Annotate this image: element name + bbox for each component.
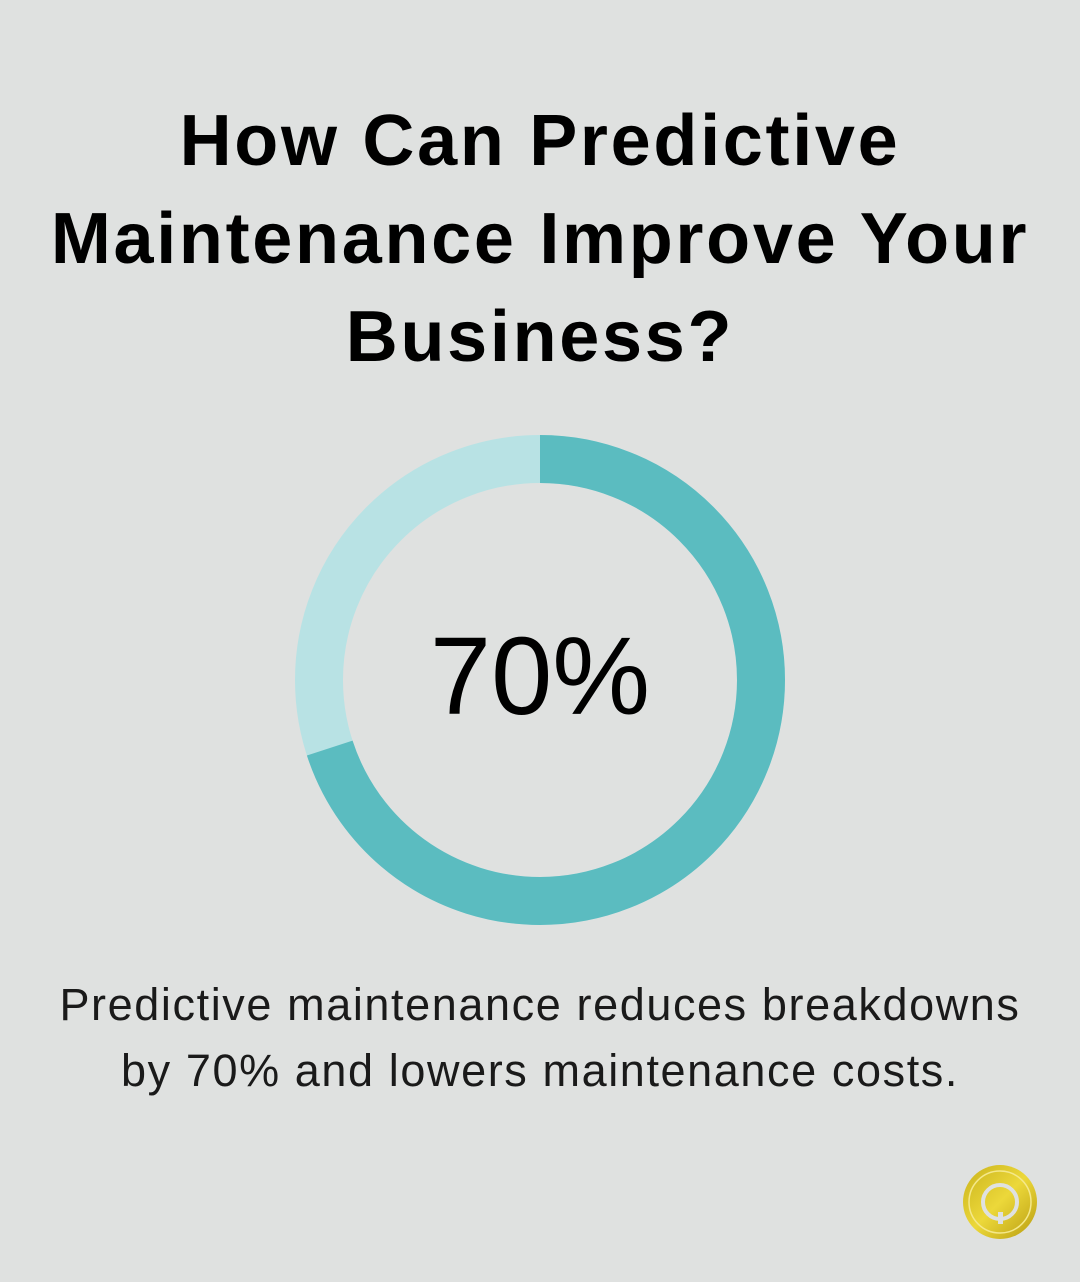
text block: by 70% and lowers maintenance costs.	[121, 1045, 959, 1096]
title	[51, 101, 1029, 377]
title: Business?	[346, 297, 734, 377]
title: Maintenance Improve Your	[51, 199, 1029, 279]
text block	[59, 979, 1021, 1096]
icon: logo	[963, 1165, 1037, 1239]
donut chart: 70%	[430, 615, 650, 738]
title: How Can Predictive	[180, 101, 900, 181]
text block: Predictive maintenance reduces breakdowns	[59, 979, 1021, 1030]
